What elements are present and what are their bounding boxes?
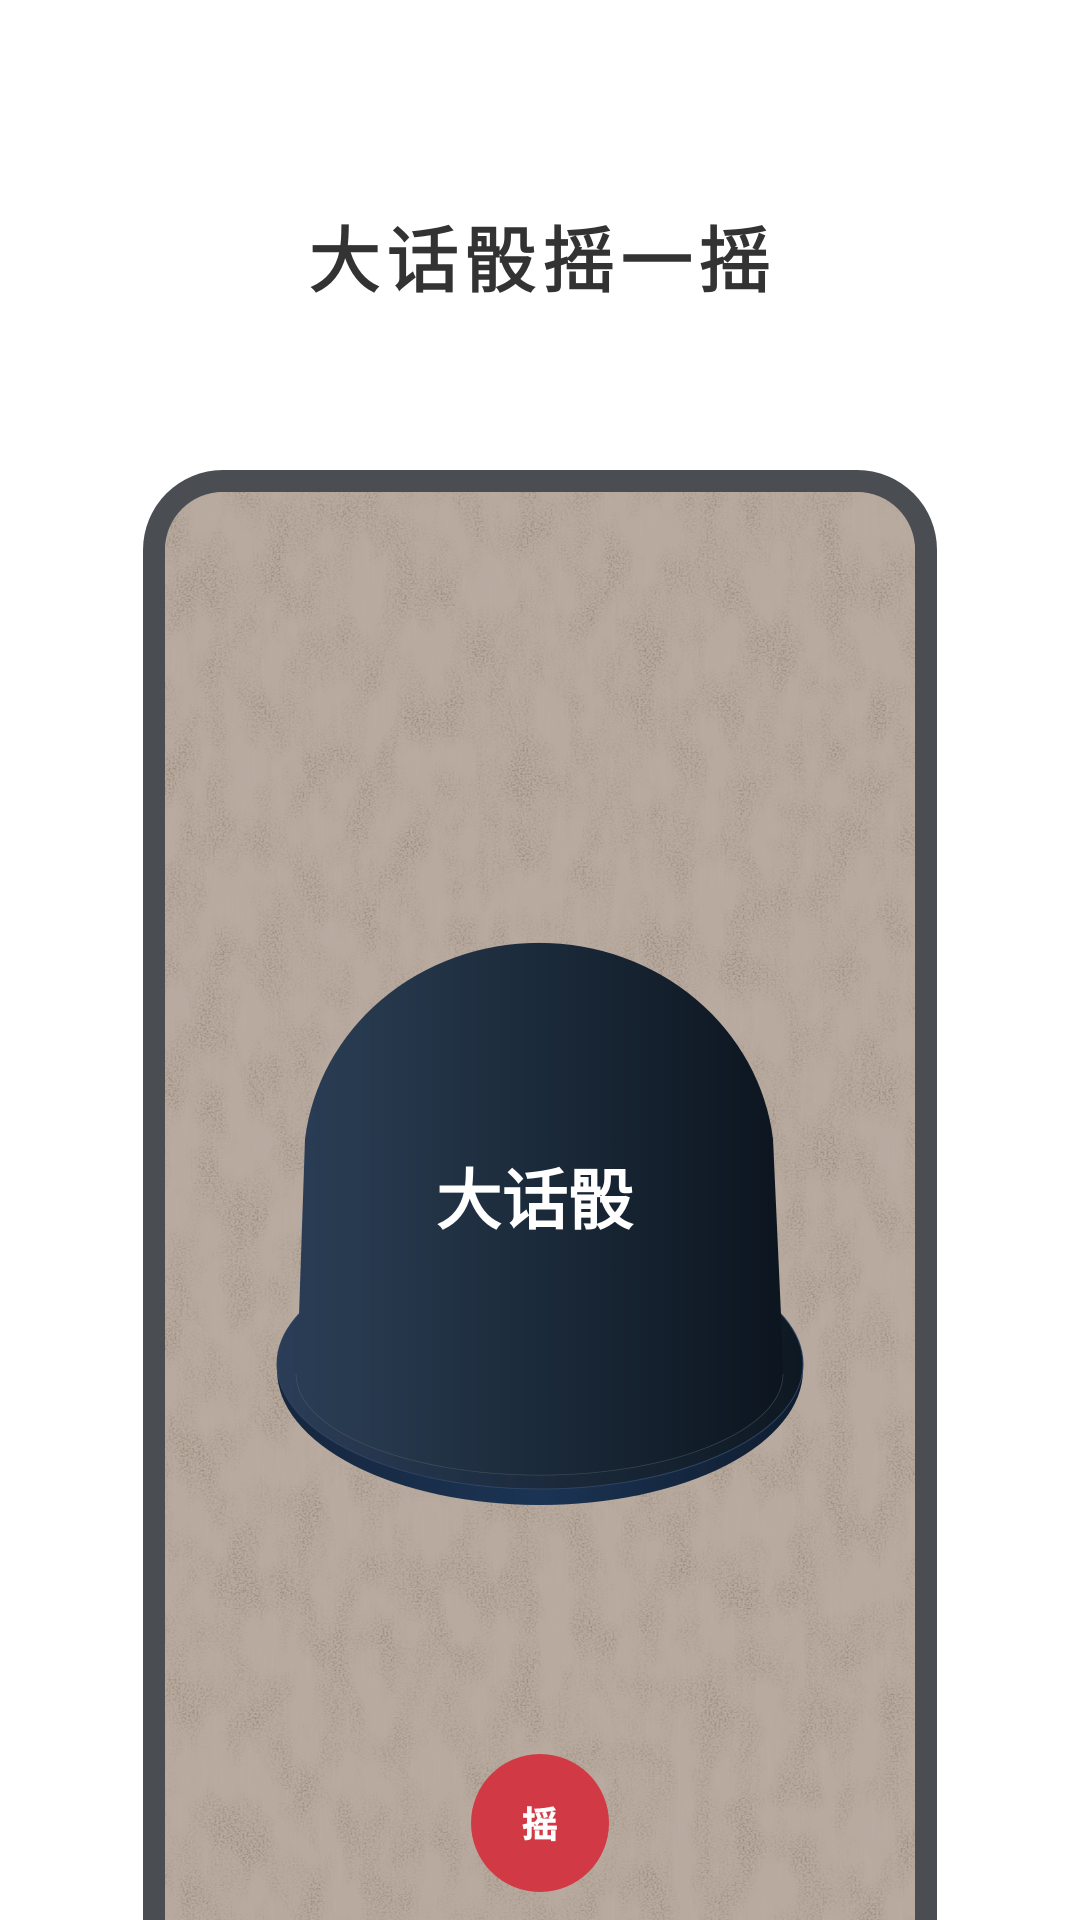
cup dome bbox=[296, 943, 783, 1475]
icon: dice cup bbox=[277, 943, 803, 1505]
cup label: 大话骰 bbox=[436, 1163, 634, 1237]
panel: phone frame with linen background bbox=[143, 470, 937, 1920]
cup rim bbox=[277, 1239, 803, 1489]
button label: 摇 bbox=[522, 1804, 558, 1845]
title: 大话骰摇一摇 bbox=[309, 222, 777, 302]
cup base plate bbox=[277, 1235, 803, 1505]
shake button bbox=[471, 1754, 609, 1892]
cup dome lower seam bbox=[296, 1374, 783, 1475]
